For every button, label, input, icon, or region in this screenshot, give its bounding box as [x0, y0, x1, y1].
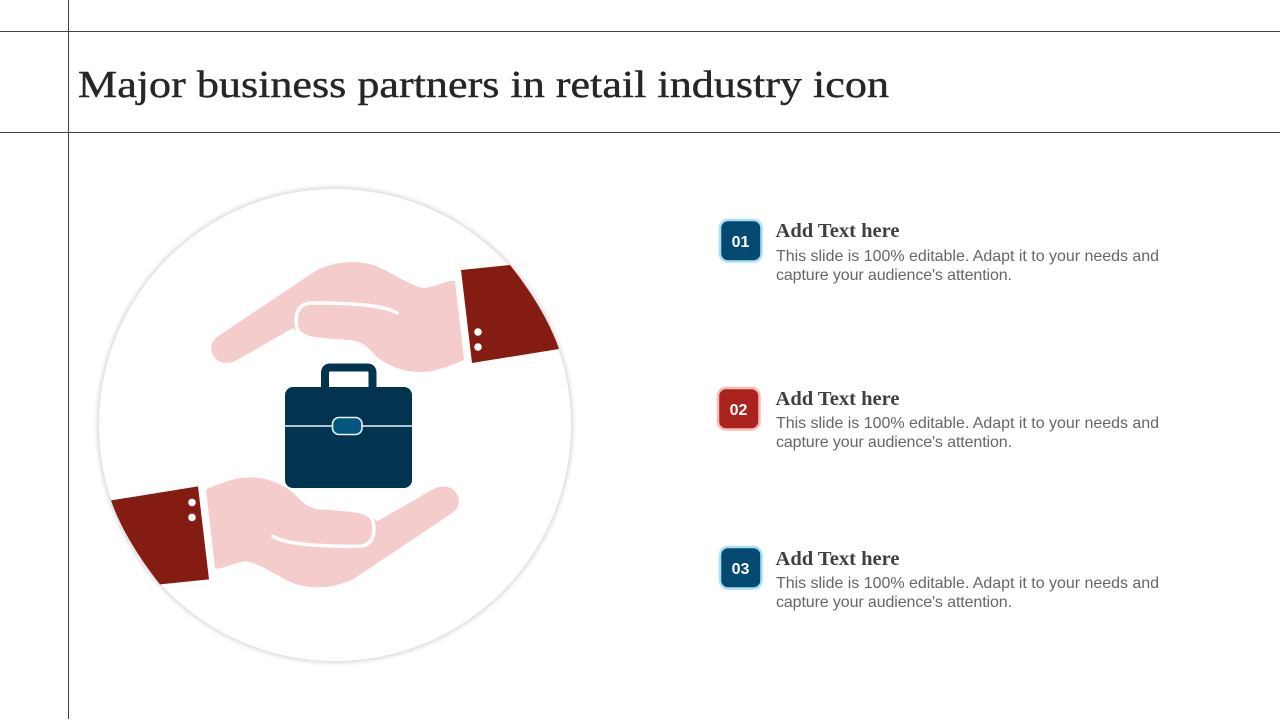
icon: briefcase [285, 368, 412, 488]
list item 01 [720, 220, 1159, 284]
title: Major business partners in retail industry icon [78, 64, 889, 106]
text block 01 [776, 248, 1159, 284]
text block 03: This slide is 100% editable. Adapt it to your needs and [776, 575, 1159, 592]
text block 03: capture your audience's attention. [776, 594, 1012, 611]
text block 02: capture your audience's attention. [776, 434, 1012, 451]
panel: circular illustration [96, 186, 574, 664]
badge 01 [720, 220, 762, 262]
text block 01: This slide is 100% editable. Adapt it to your needs and [776, 248, 1159, 265]
list item 03 [720, 547, 1159, 611]
icon: lower hand [111, 477, 459, 587]
heading 01: Add Text here [776, 220, 900, 242]
badge 02 [718, 388, 760, 430]
badge 02: 02 [730, 402, 748, 419]
text block 03 [776, 575, 1159, 611]
text block 02 [776, 415, 1159, 451]
text block 02: This slide is 100% editable. Adapt it to your needs and [776, 415, 1159, 432]
badge 03: 03 [732, 561, 750, 578]
circle background [96, 186, 574, 664]
list item 02 [718, 388, 1159, 451]
heading 02: Add Text here [776, 388, 900, 410]
heading 03: Add Text here [776, 548, 900, 570]
text block 01: capture your audience's attention. [776, 267, 1012, 284]
badge 03 [720, 547, 762, 588]
badge 01: 01 [732, 234, 750, 251]
icon: upper hand [211, 262, 559, 372]
